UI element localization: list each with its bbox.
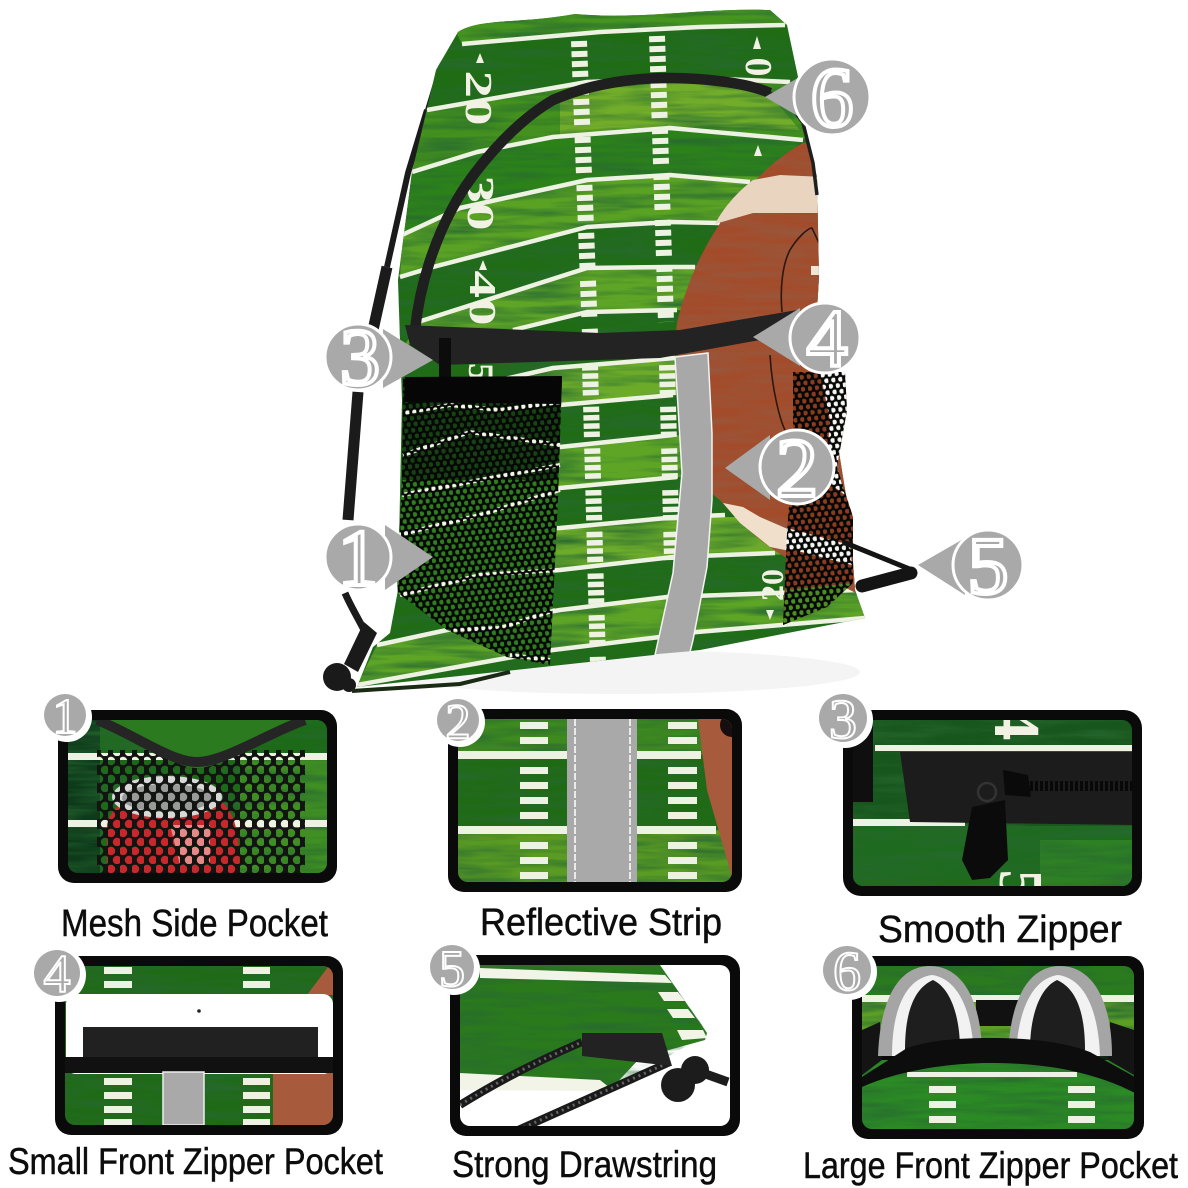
yard numbers: 0: [737, 58, 779, 76]
bag body: football field: [340, 0, 880, 700]
zipper slider and pull: [962, 770, 1031, 880]
callout 5: 5: [968, 520, 1008, 611]
callout 2: 2: [776, 422, 818, 515]
small pocket zipper band: [405, 310, 797, 365]
zipper arc: [862, 1038, 1135, 1093]
yard numbers: 5: [461, 363, 501, 381]
badge 4: [32, 944, 86, 1004]
panel 3: smooth zipper: 4: [980, 708, 1053, 740]
callout 1: [325, 515, 433, 603]
panel 3: smooth zipper: 5: [986, 870, 1054, 900]
right drawstring: [843, 542, 912, 570]
caption: Strong Drawstring: Strong Drawstring: [452, 1144, 717, 1185]
badge 6: [821, 941, 877, 1003]
callout 3: [325, 314, 433, 402]
badge 5: [428, 941, 480, 998]
callout 1: 1: [338, 515, 378, 603]
zipper tape: [900, 752, 1132, 825]
panel 5: strong drawstring: [450, 955, 740, 1136]
football: [675, 142, 856, 594]
callout 6: [765, 49, 870, 145]
left drawstring: [345, 38, 458, 630]
panel 4: small front zipper pocket: [55, 956, 343, 1135]
panel 2: reflective strip: [448, 709, 744, 892]
callout 4: [753, 293, 860, 384]
left shoe: [878, 966, 982, 1056]
yard numbers: 20: [457, 70, 499, 126]
right toggle: [862, 573, 911, 586]
callout 6: 6: [810, 49, 854, 145]
right shoe: [1008, 966, 1112, 1056]
badge 3: 3: [829, 689, 857, 751]
bag bottom seam: [352, 672, 510, 691]
right side mesh pocket: [783, 372, 853, 625]
badge 1: 1: [52, 688, 78, 744]
badge 5: 5: [439, 941, 465, 998]
panel 6: large front zipper pocket: [852, 956, 1144, 1139]
drawstring backpack: [323, 0, 912, 700]
zipper edge along right shoulder: [770, 93, 817, 195]
zipper pull: [439, 338, 451, 382]
badge 2: [435, 693, 485, 749]
yard numbers: 30: [459, 176, 501, 230]
left cord toggle and knot: [323, 622, 377, 692]
callout 4: 4: [806, 293, 848, 384]
caption: Small Front Zipper Pocket: Small Front Zipper Pocket: [8, 1141, 384, 1182]
callout 2: [725, 422, 834, 515]
yard numbers: 20: [754, 569, 790, 601]
badge 4: 4: [44, 944, 70, 1004]
caption: Mesh Side Pocket: Mesh Side Pocket: [61, 903, 328, 945]
large pocket zipper arc: [415, 78, 770, 330]
caption: Smooth Zipper: Smooth Zipper: [878, 909, 1122, 951]
bag shadow: [380, 650, 860, 694]
drawstring rope and knot: [460, 1033, 728, 1130]
yard lines: [357, 25, 865, 685]
panel 1: mesh side pocket: [58, 710, 337, 883]
hash marks: [579, 36, 672, 665]
badge 3: [817, 689, 873, 751]
caption: Reflective Strip: Reflective Strip: [480, 902, 722, 944]
tablet: [66, 994, 333, 1074]
badge 6: 6: [833, 941, 861, 1003]
callout 3: 3: [340, 314, 380, 402]
yard numbers: [457, 36, 790, 620]
soda can: [107, 776, 240, 873]
reflective strip: [655, 353, 712, 655]
callout 5: [918, 520, 1023, 611]
left mesh pocket: [397, 376, 562, 665]
badge 2: 2: [446, 693, 470, 749]
panel 3: smooth zipper: [843, 708, 1142, 900]
yard numbers: 40: [461, 270, 503, 326]
badge 1: [42, 688, 92, 744]
